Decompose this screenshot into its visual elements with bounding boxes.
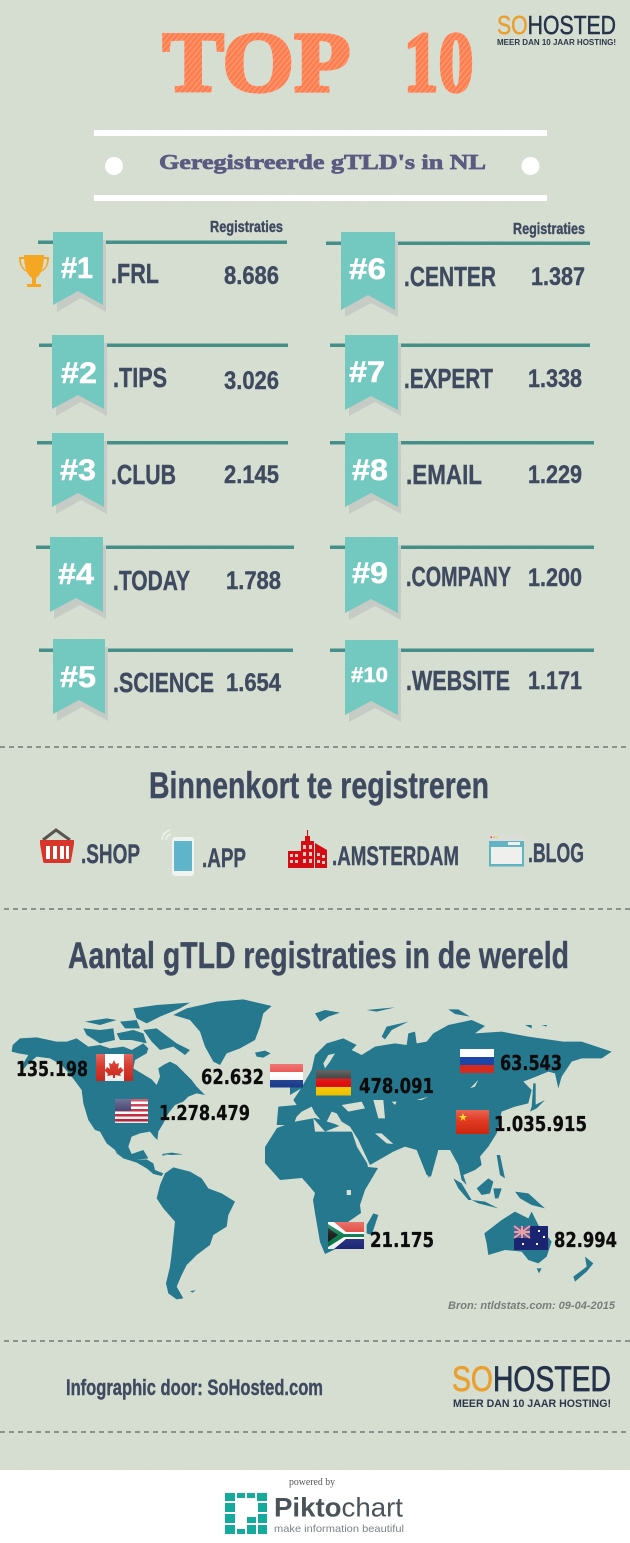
rank row 5: #5 — [60, 661, 96, 694]
world map — [12, 999, 612, 1299]
rank row 4: 1.788 — [226, 567, 281, 595]
upcoming: app — [162, 830, 246, 876]
label: germany: 478.091 — [359, 1074, 434, 1098]
rank row 4 — [36, 537, 294, 619]
column header: registraties left: Registraties — [210, 219, 283, 236]
rank row 8: #8 — [352, 454, 388, 487]
rank row 8: 1.229 — [528, 461, 582, 489]
region: indian ocean and oceania — [347, 1155, 593, 1282]
continent: africa — [265, 1118, 378, 1254]
rank row 2 — [39, 335, 288, 416]
rank row 5 — [39, 639, 293, 721]
rank row 7: #7 — [349, 356, 385, 389]
upcoming: app: .APP — [202, 843, 246, 873]
rank row 2: .TIPS — [113, 362, 167, 393]
rank row 5: .SCIENCE — [113, 667, 214, 698]
flag: south africa — [328, 1222, 364, 1249]
logo: piktochart: Piktochart — [274, 1492, 404, 1522]
label: south africa: 21.175 — [370, 1228, 434, 1252]
logo: piktochart — [225, 1492, 404, 1535]
rank row 9: .COMPANY — [406, 561, 511, 592]
rank row 9 — [330, 537, 594, 620]
logo: piktochart: make information beautiful — [274, 1523, 404, 1535]
rank row 3: .CLUB — [111, 459, 176, 490]
title: 10 — [404, 14, 474, 110]
rank row 9: 1.200 — [528, 564, 582, 592]
continent: eurasia — [277, 1007, 612, 1185]
subtitle banner: Geregistreerde gTLD's in NL — [159, 150, 486, 174]
flag: china — [456, 1110, 489, 1134]
label: netherlands: 62.632 — [201, 1065, 264, 1089]
logo: SoHosted top: MEER DAN 10 JAAR HOSTING! — [497, 38, 616, 47]
flag: russia — [460, 1049, 494, 1073]
rank row 7 — [330, 335, 590, 416]
flag: usa — [115, 1099, 148, 1123]
column header: registraties right: Registraties — [513, 221, 585, 238]
rank row 1: 8.686 — [224, 262, 279, 290]
subtitle banner — [94, 130, 547, 201]
rank row 1 — [38, 232, 287, 312]
rank row 5: 1.654 — [226, 669, 281, 697]
upcoming: blog — [489, 835, 584, 868]
flag: germany — [316, 1070, 351, 1096]
flag: canada — [96, 1054, 133, 1081]
upcoming: amsterdam — [288, 830, 459, 871]
upcoming: blog: .BLOG — [528, 838, 584, 868]
source note: Bron: ntldstats.com: 09-04-2015 — [448, 1300, 616, 1312]
upcoming: shop: .SHOP — [81, 839, 140, 869]
region: americas south — [115, 1150, 235, 1299]
upcoming: shop — [40, 830, 140, 869]
rank row 4: .TODAY — [113, 565, 190, 596]
rank row 1: .FRL — [111, 258, 159, 289]
rank row 2: 3.026 — [224, 367, 279, 395]
icon: trophy — [19, 255, 49, 287]
rank row 7: 1.338 — [528, 365, 582, 393]
flag: netherlands — [270, 1064, 303, 1088]
label: russia: 63.543 — [500, 1051, 562, 1075]
rank row 10 — [330, 640, 594, 722]
rank row 6 — [326, 232, 590, 317]
rank row 9: #9 — [352, 557, 388, 590]
rank row 10: 1.171 — [528, 667, 582, 695]
heading: binnenkort: Binnenkort te registreren — [149, 765, 489, 806]
logo: SoHosted bottom: MEER DAN 10 JAAR HOSTING! — [453, 1398, 611, 1410]
powered by: powered by — [289, 1477, 335, 1488]
white footer band — [0, 1470, 630, 1543]
rank row 6: 1.387 — [531, 263, 585, 291]
label: australia: 82.994 — [554, 1228, 617, 1252]
rank row 6: #6 — [349, 253, 386, 286]
rank row 4: #4 — [58, 558, 94, 591]
rank row 10: #10 — [351, 664, 388, 687]
rank row 6: .CENTER — [404, 261, 496, 292]
footer credit: Infographic door: SoHosted.com — [66, 1375, 323, 1400]
label: canada: 135.198 — [16, 1057, 88, 1081]
title: TOP — [162, 14, 350, 110]
rank row 8: .EMAIL — [406, 459, 482, 490]
rank row 3 — [37, 433, 288, 514]
rank row 2: #2 — [61, 357, 97, 390]
rank row 3: 2.145 — [224, 461, 279, 489]
label: china: 1.035.915 — [494, 1112, 587, 1136]
rank row 10: .WEBSITE — [406, 665, 510, 696]
rank row 3: #3 — [60, 454, 96, 487]
flag: australia — [514, 1226, 548, 1250]
rank row 1: #1 — [61, 252, 93, 285]
title — [162, 14, 474, 110]
rank row 8 — [330, 433, 594, 514]
region: americas north — [12, 999, 272, 1160]
label: usa: 1.278.479 — [159, 1101, 250, 1125]
upcoming: amsterdam: .AMSTERDAM — [332, 841, 459, 871]
rank row 7: .EXPERT — [404, 363, 493, 394]
